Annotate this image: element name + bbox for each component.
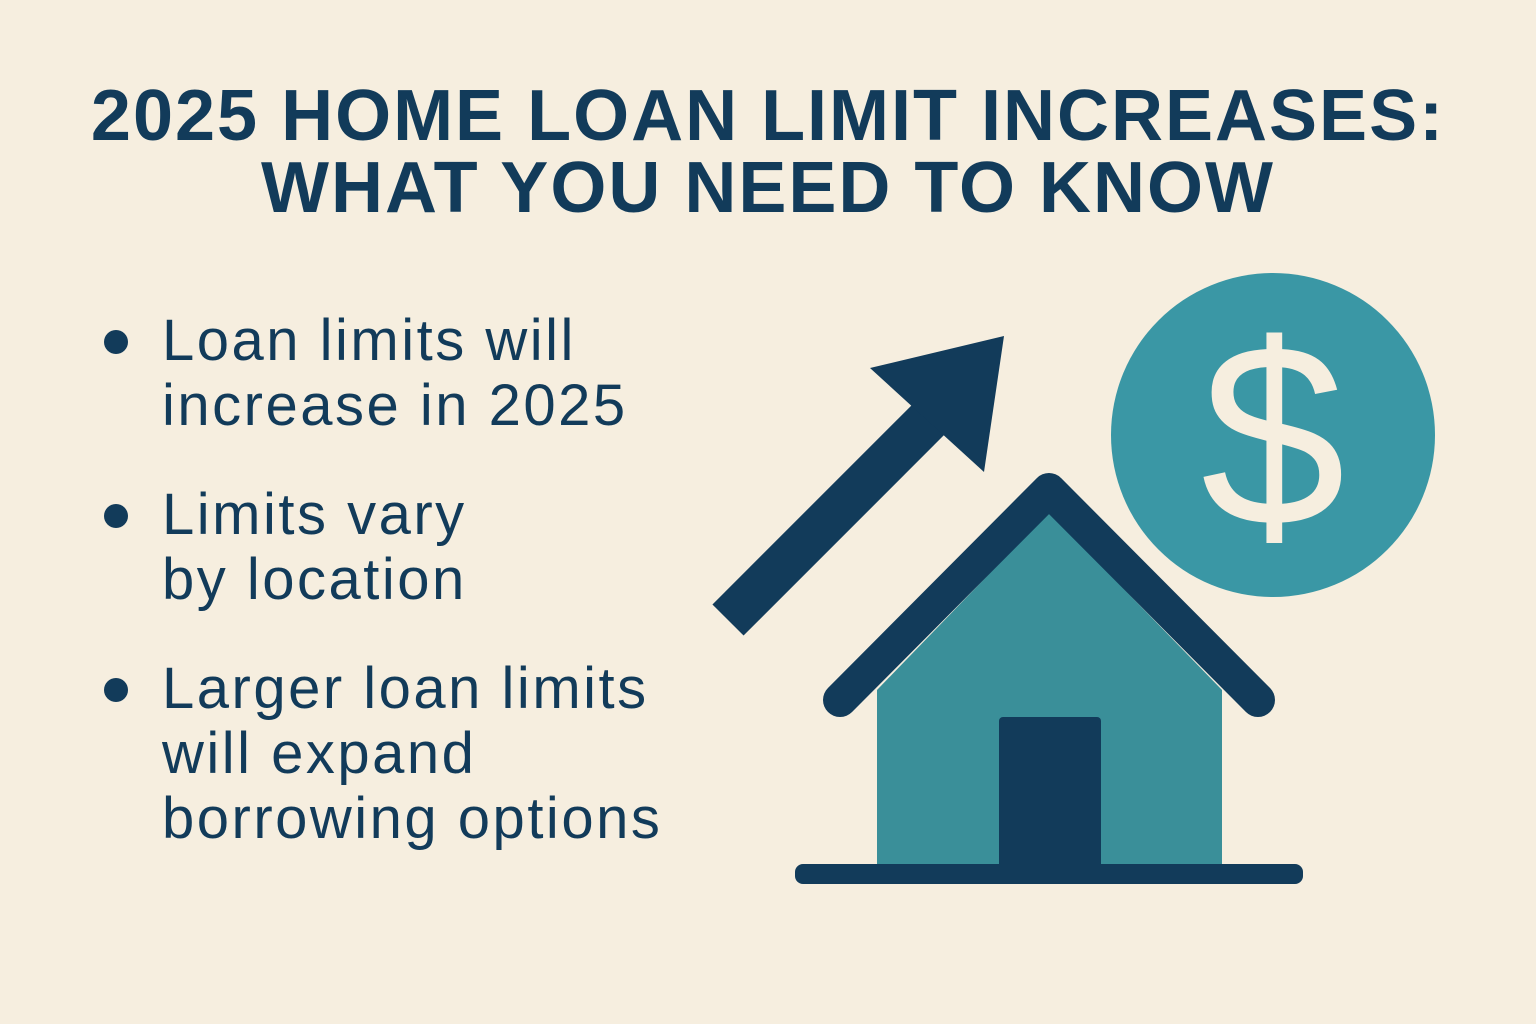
icon: house: [795, 490, 1303, 884]
bullet 2: [100, 482, 740, 612]
title: WHAT YOU NEED TO KNOW: [261, 148, 1275, 228]
bullet 3: Larger loan limits: [162, 656, 649, 721]
bullet 2: by location: [162, 547, 467, 612]
icon: dollar coin: $: [1201, 291, 1345, 581]
icon: arrow: [728, 336, 1004, 620]
bullet 1: [100, 308, 740, 438]
title: 2025 HOME LOAN LIMIT INCREASES:: [91, 76, 1445, 156]
title: [91, 76, 1445, 228]
bullet 3: [100, 656, 740, 851]
bullet 3: will expand: [162, 721, 476, 786]
bullet list: [104, 308, 662, 851]
bullet 2: Limits vary: [162, 482, 467, 547]
bullet 3: borrowing options: [162, 786, 662, 851]
bullet 1: Loan limits will: [162, 308, 576, 373]
bullet 1: increase in 2025: [162, 373, 628, 438]
icon: dollar coin: [1111, 273, 1435, 597]
